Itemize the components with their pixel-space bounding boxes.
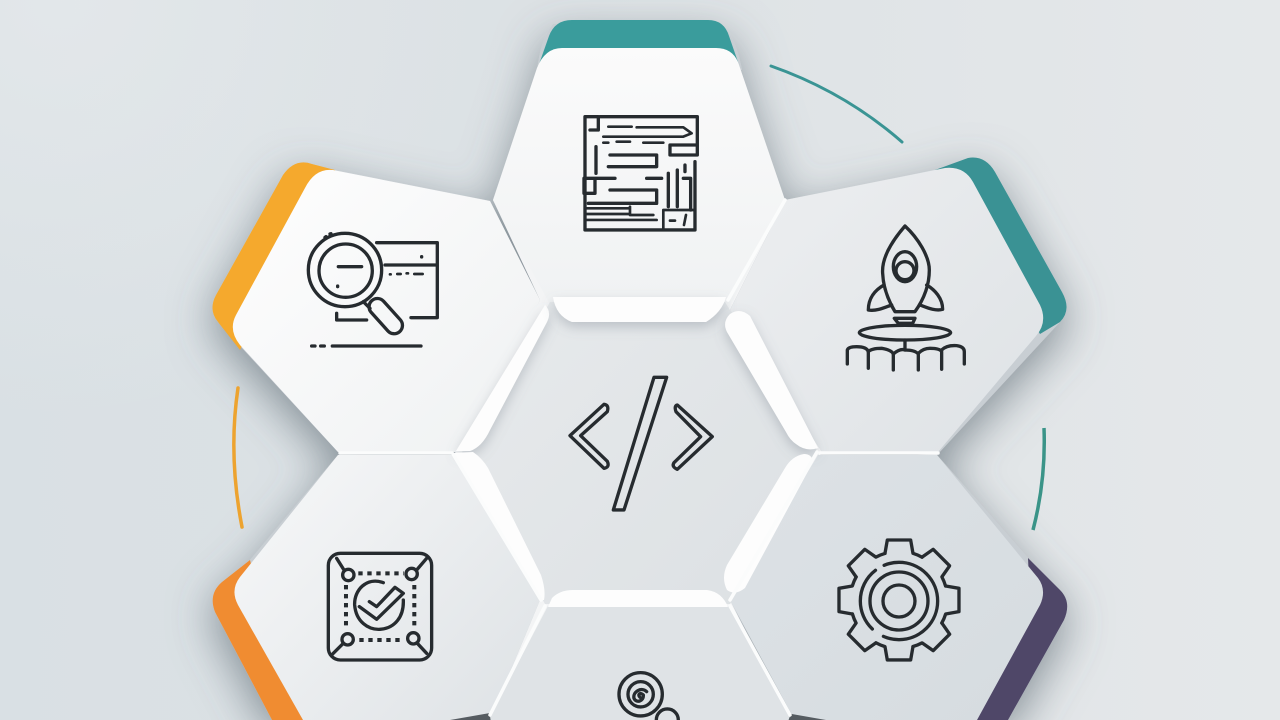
accent: yellow tab <box>212 162 335 350</box>
icon: magnifier lens <box>619 673 678 720</box>
icon: rocket launch <box>847 226 964 370</box>
bevel: top bar <box>553 297 726 322</box>
bevel: bottom bar <box>548 590 728 607</box>
bevel: lower-right bar <box>724 454 813 593</box>
accent: left dark tab <box>450 713 495 720</box>
panel: top hexagon <box>493 20 785 310</box>
panel: bottom-left hexagon <box>213 455 540 720</box>
accent: teal tab <box>935 158 1067 334</box>
dividers <box>340 200 938 715</box>
hexagon face <box>462 302 818 604</box>
panel: centre hexagon <box>453 297 818 607</box>
icon: gear <box>839 540 959 660</box>
icon: code brackets <box>570 377 712 510</box>
bevel: lower-left bar <box>453 452 545 600</box>
hexagon face <box>233 170 540 452</box>
hexagon face <box>490 606 790 720</box>
accent: right dark tab <box>786 713 826 720</box>
accent: teal tab <box>535 20 742 90</box>
accent: orange tab <box>213 560 310 720</box>
accent: purple tab <box>975 558 1067 720</box>
hexagon face <box>730 455 1043 720</box>
panel: bottom-right hexagon <box>730 455 1067 720</box>
icon: verified checkbox <box>328 553 432 660</box>
panel: top-right hexagon <box>730 158 1067 452</box>
panel: top-left hexagon <box>212 162 540 452</box>
hexagon face <box>730 168 1043 452</box>
panel: bottom hexagon <box>450 606 826 720</box>
icon: magnifier over window <box>308 233 437 346</box>
arc: teal top right <box>771 66 902 142</box>
hexagon face <box>493 48 785 310</box>
bevel: upper-left bar <box>456 305 549 451</box>
arc: orange left <box>234 388 242 527</box>
bevel: upper-right bar <box>725 311 818 449</box>
hexagon face <box>234 455 540 720</box>
icon: code map <box>584 117 697 230</box>
arc: teal right <box>1033 428 1044 530</box>
